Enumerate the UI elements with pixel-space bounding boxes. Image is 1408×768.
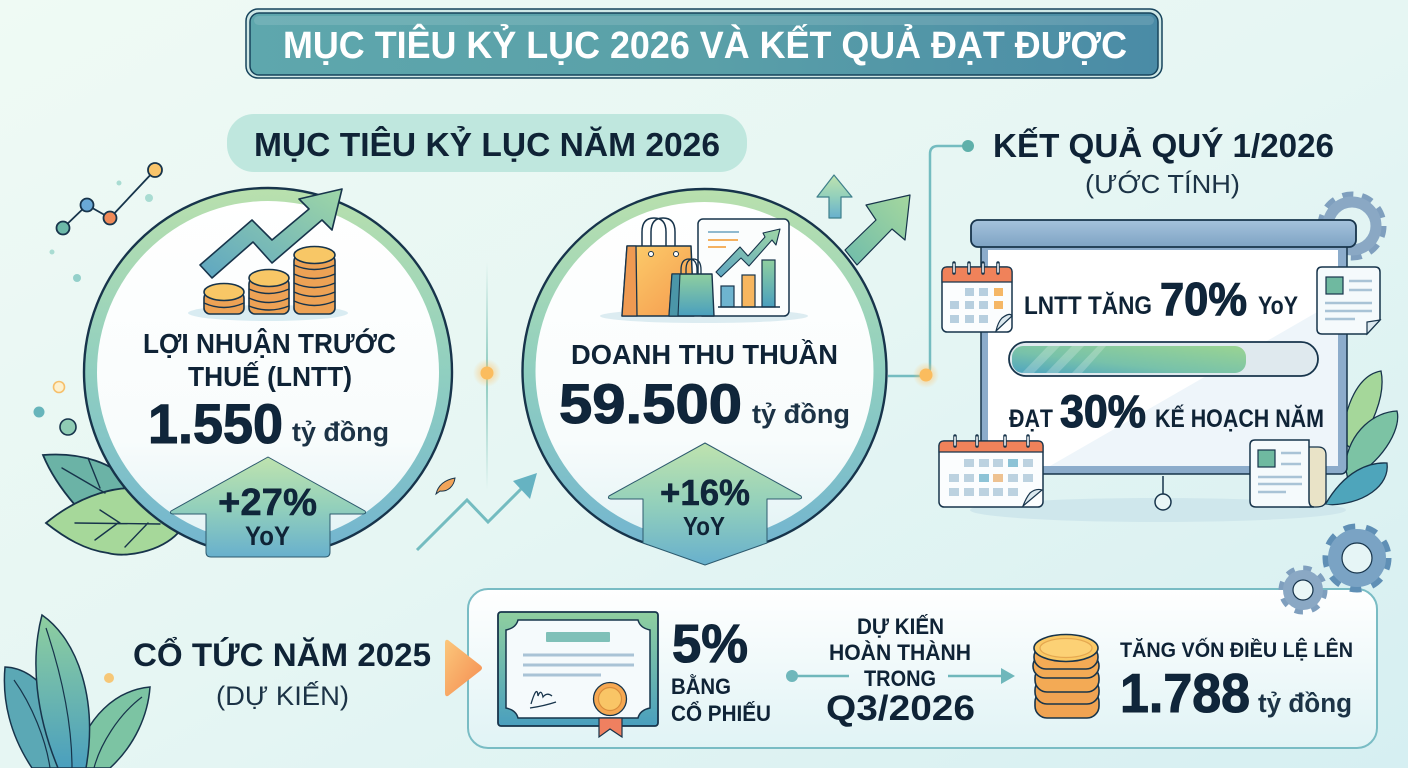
heading: Q1/2026 results: KẾT QUẢ QUÝ 1/2026 [993, 127, 1334, 164]
divider with orange node [473, 262, 501, 490]
value: 59.500 tỷ đồng: tỷ đồng [752, 399, 850, 429]
arrow badge: +16% YoY [608, 443, 802, 565]
icon: shopping bags and chart [600, 218, 808, 323]
text: profit up 70% YoY: 70% [1160, 273, 1247, 325]
heading: Q1/2026 results [993, 127, 1334, 199]
text: 5% in shares: 5% [672, 614, 748, 674]
panel: presentation screen [939, 220, 1380, 522]
text: raise charter capital to 1.788: tỷ đồng [1258, 688, 1352, 718]
title text: MỤC TIÊU KỶ LỤC 2026 VÀ KẾT QUẢ ĐẠT ĐƯỢC [283, 23, 1127, 67]
pill text: MỤC TIÊU KỶ LỤC NĂM 2026 [254, 126, 720, 163]
text: 5% in shares: CỔ PHIẾU [671, 701, 771, 726]
heading: dividend 2025 [133, 637, 431, 711]
icon: gear behind screen [1322, 196, 1382, 256]
value: 59.500 tỷ đồng: 59.500 [559, 372, 742, 435]
title banner [246, 9, 1162, 78]
value: 1.550 tỷ đồng [148, 392, 389, 455]
screen stand [1155, 476, 1171, 510]
icon: gears bottom right [1282, 528, 1387, 611]
leaves left of first circle [43, 454, 178, 555]
arrow badge: +27% YoY: YoY [245, 521, 290, 551]
text: 5% in shares [671, 614, 771, 726]
progress bar: 30% [1009, 342, 1318, 376]
connector from revenue circle to Q1 results [888, 140, 974, 388]
icon: small orange leaf [436, 478, 455, 494]
text: raise charter capital to 1.788 [1120, 638, 1353, 724]
value: 1.550 tỷ đồng: tỷ đồng [292, 417, 389, 447]
icon: calendar bottom [939, 436, 1043, 507]
arrow badge: +27% YoY: +27% [218, 482, 317, 524]
text: reached 30% of annual plan: KẾ HOẠCH NĂM [1155, 404, 1324, 433]
text: reached 30% of annual plan [1009, 386, 1324, 437]
arrow badge: +16% YoY: +16% [660, 472, 750, 513]
panel: profit circle [84, 188, 452, 557]
arrow: timeline [786, 668, 1015, 684]
arrow badge: +16% YoY: YoY [683, 511, 725, 541]
arrow: orange triangle [445, 640, 482, 696]
text: expected completion Q3/2026 [826, 614, 975, 728]
icon: document top right [1317, 267, 1380, 334]
decoration: line chart top left [34, 163, 162, 435]
arrow: large green outward arrow [845, 195, 910, 265]
text: expected completion Q3/2026: HOÀN THÀNH [829, 640, 971, 665]
text: 5% in shares: BẰNG [671, 674, 731, 699]
label: profit before tax: LỢI NHUẬN TRƯỚC [143, 328, 396, 359]
panel: dividend details [468, 589, 1377, 748]
panel: revenue circle [522, 189, 910, 565]
text: expected completion Q3/2026: TRONG [864, 666, 936, 691]
text: profit up 70% YoY: LNTT TĂNG [1024, 291, 1152, 320]
text: profit up 70% YoY: YoY [1258, 292, 1298, 320]
icon: calendar top [942, 263, 1012, 332]
leaves bottom left [4, 615, 150, 768]
text: raise charter capital to 1.788: TĂNG VỐN ĐIỀU LỆ LÊN [1120, 638, 1353, 662]
text: raise charter capital to 1.788: 1.788 [1120, 662, 1250, 724]
text: expected completion Q3/2026: DỰ KIẾN [857, 614, 944, 639]
label: net revenue: DOANH THU THUẦN [571, 339, 838, 370]
icon: rising zigzag arrow [200, 189, 342, 278]
value: 1.550 tỷ đồng: 1.550 [148, 392, 283, 455]
value: 59.500 tỷ đồng [559, 372, 850, 435]
subheading: planned: (DỰ KIẾN) [216, 680, 349, 711]
icon: coin stacks [188, 246, 348, 321]
text: reached 30% of annual plan: ĐẠT [1009, 405, 1053, 433]
heading: dividend 2025: CỔ TỨC NĂM 2025 [133, 637, 431, 673]
icon: coin stack [1033, 634, 1099, 718]
text: reached 30% of annual plan: 30% [1060, 386, 1146, 437]
text: profit up 70% YoY [1024, 273, 1298, 325]
arrow badge: +27% YoY [170, 457, 366, 557]
icon: certificate [498, 612, 658, 737]
label: profit before tax: THUẾ (LNTT) [188, 361, 352, 392]
label: profit before tax [143, 328, 396, 392]
leaves right of screen [1325, 371, 1398, 505]
text: expected completion Q3/2026: Q3/2026 [826, 689, 975, 728]
arrow: small green up arrow [817, 175, 852, 218]
subheading: estimated: (ƯỚC TÍNH) [1085, 169, 1240, 199]
icon: newspaper bottom right [1250, 440, 1326, 507]
heading pill: record target 2026 [227, 114, 747, 172]
arrow: thin teal trend [417, 473, 537, 550]
